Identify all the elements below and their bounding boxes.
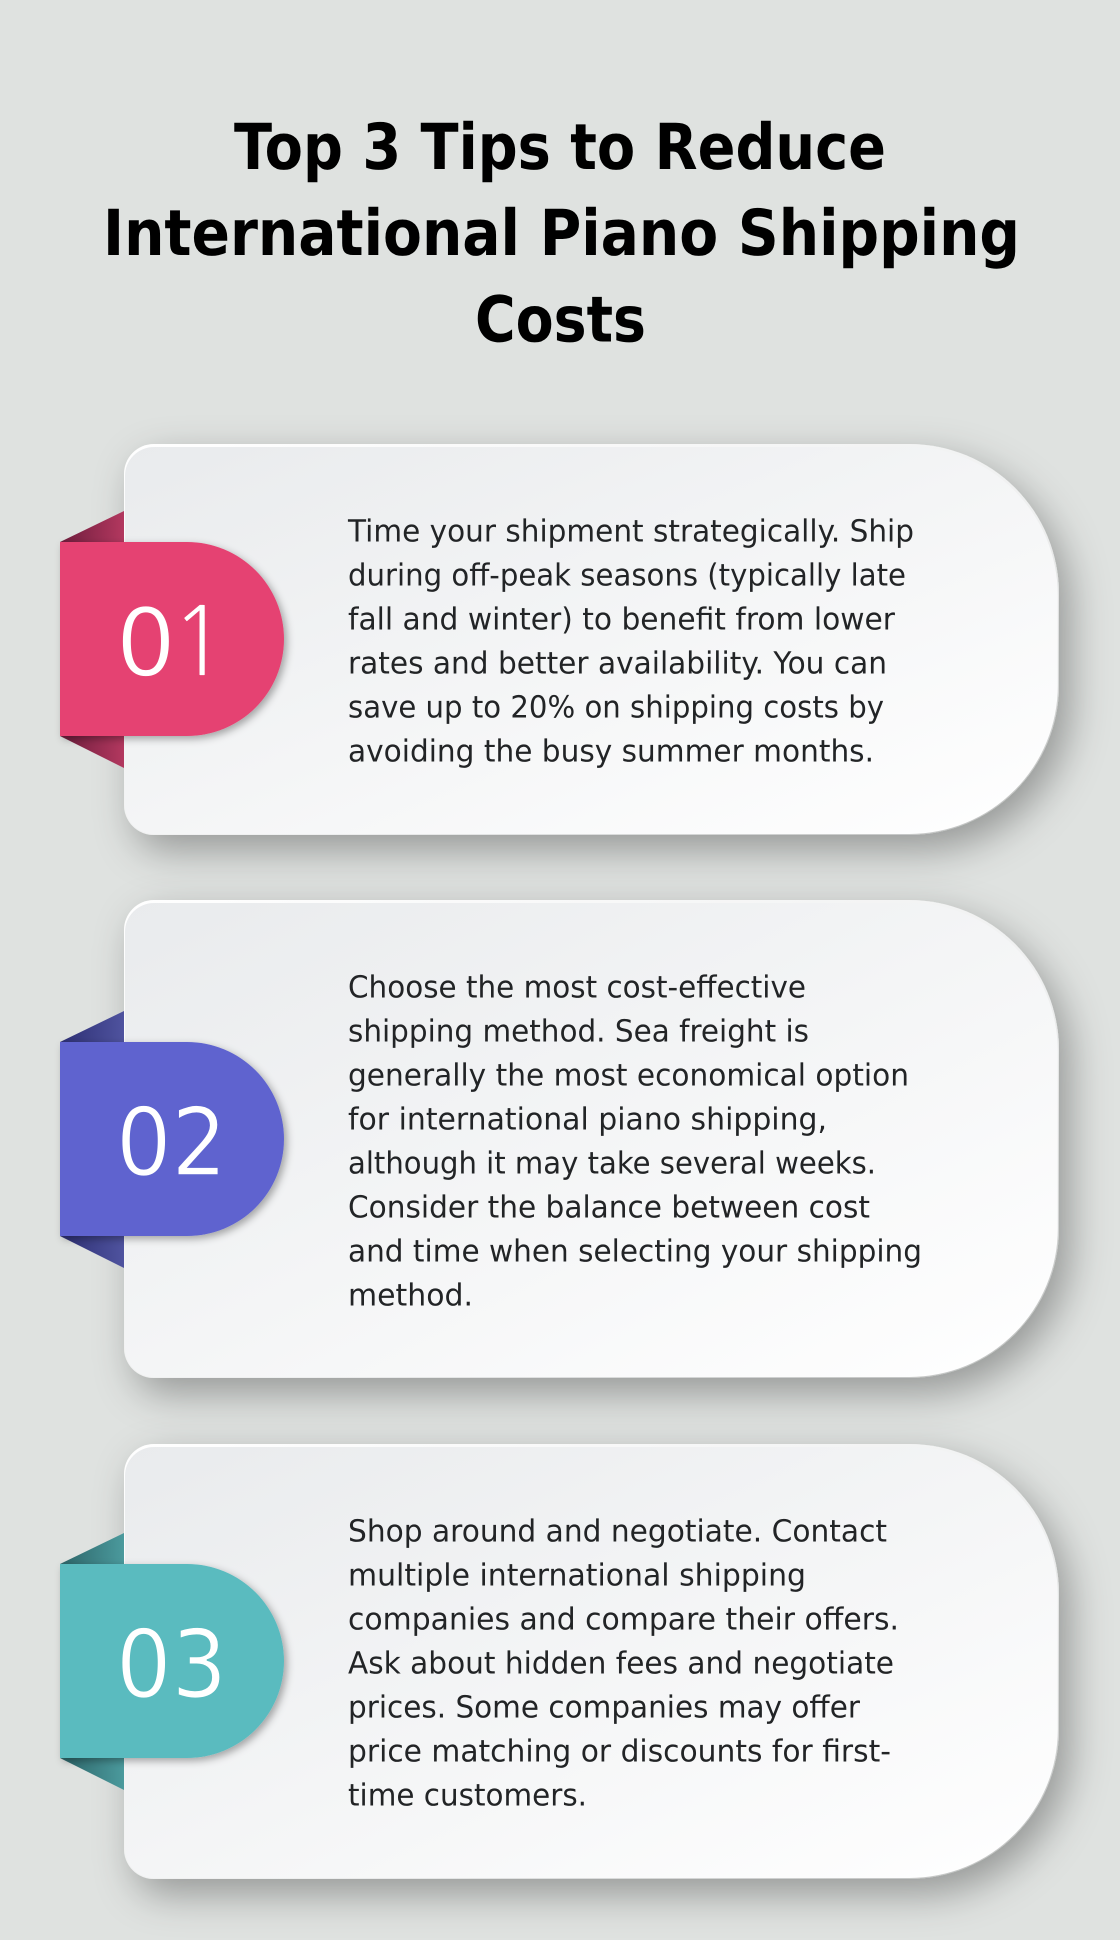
ribbon fold top 03	[60, 1533, 124, 1564]
text: tip 02: Choose the most cost-effective	[348, 970, 806, 1006]
ribbon fold bottom 02	[60, 1236, 124, 1268]
text: tip 01: rates and better availability. You can	[348, 646, 887, 682]
title: Top 3 Tips to Reduce	[234, 110, 886, 184]
number badge 01	[60, 542, 284, 736]
text: tip 03	[348, 1514, 899, 1814]
text: tip 02: for international piano shipping,	[348, 1102, 827, 1138]
number 03: 03	[116, 1611, 227, 1720]
ribbon fold top 02	[60, 1011, 124, 1042]
text: tip 02: although it may take several weeks.	[348, 1146, 876, 1182]
number badge 02	[60, 1042, 284, 1236]
card 03	[124, 1444, 1059, 1879]
text: tip 01: avoiding the busy summer months.	[348, 734, 874, 770]
card 02	[124, 900, 1059, 1378]
ribbon fold bottom 01	[60, 736, 124, 768]
ribbon fold top 01	[60, 511, 124, 542]
panel: tip 03	[60, 1444, 1059, 1879]
text: tip 01: save up to 20% on shipping costs by	[348, 690, 884, 726]
text: tip 02	[348, 970, 922, 1314]
text: tip 03: companies and compare their offers.	[348, 1602, 899, 1638]
text: tip 02: and time when selecting your shipping	[348, 1234, 922, 1270]
number badge 03	[60, 1564, 284, 1758]
text: tip 03: Ask about hidden fees and negotiate	[348, 1646, 894, 1682]
title	[103, 110, 1020, 356]
text: tip 03: multiple international shipping	[348, 1558, 806, 1594]
ribbon fold bottom 03	[60, 1758, 124, 1790]
number 02: 02	[116, 1089, 227, 1198]
title: International Piano Shipping	[103, 196, 1020, 270]
text: tip 01: fall and winter) to benefit from lower	[348, 602, 895, 638]
text: tip 03: prices. Some companies may offer	[348, 1690, 860, 1726]
text: tip 02: shipping method. Sea freight is	[348, 1014, 809, 1050]
text: tip 02: method.	[348, 1278, 473, 1314]
number 01: 0	[116, 590, 176, 698]
title: Costs	[475, 282, 646, 356]
text: tip 03: Shop around and negotiate. Contact	[348, 1514, 887, 1550]
number 01: 1	[170, 594, 228, 690]
text: tip 01: during off-peak seasons (typically late	[348, 558, 906, 594]
text: tip 03: time customers.	[348, 1778, 587, 1814]
panel: tip 01	[60, 444, 1059, 835]
card 01	[124, 444, 1059, 835]
text: tip 02: generally the most economical option	[348, 1058, 909, 1094]
panel: tip 02	[60, 900, 1059, 1378]
text: tip 01: Time your shipment strategically. Ship	[347, 514, 914, 550]
text: tip 03: price matching or discounts for first-	[348, 1734, 891, 1770]
text: tip 01	[347, 514, 914, 770]
text: tip 02: Consider the balance between cost	[348, 1190, 870, 1226]
